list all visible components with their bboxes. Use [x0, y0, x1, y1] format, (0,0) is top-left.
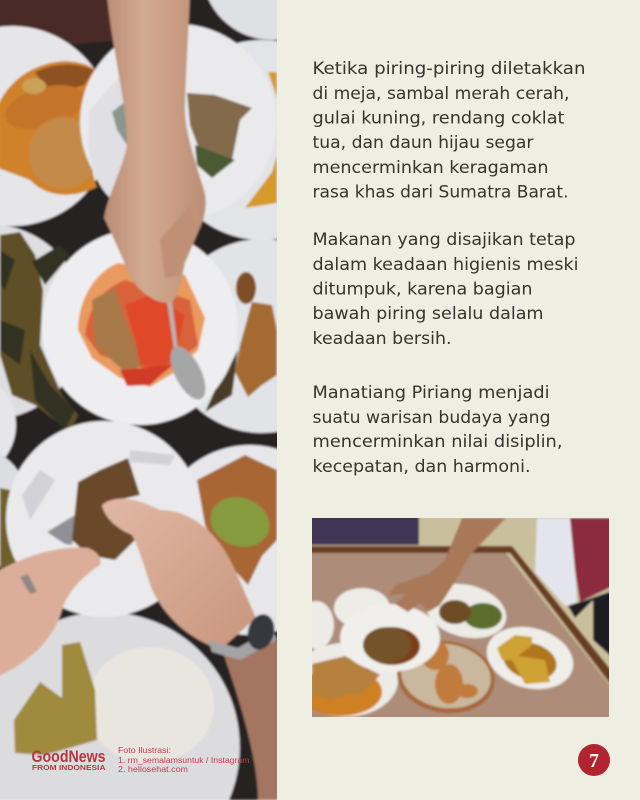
red chili strips [125, 295, 185, 370]
meat [363, 627, 411, 663]
dark edge [205, 350, 238, 412]
plate: lower centre [6, 421, 202, 617]
food: rendang [72, 458, 140, 560]
text block: paragraph 3: Manatiang Piriang menjadi [312, 383, 550, 403]
plate: brown rim [392, 635, 500, 719]
ring [20, 574, 37, 594]
food: yellow curry [497, 635, 561, 685]
badge number: 7 [589, 750, 599, 772]
food: greens at lower left [0, 488, 15, 572]
white shirt [535, 518, 577, 606]
food: fish with green sambal [197, 455, 277, 585]
bowl [168, 345, 206, 400]
food: rendang [363, 627, 420, 665]
text block: paragraph 1: tua, dan daun hijau segar [312, 133, 534, 153]
curry sauce [499, 637, 561, 685]
brown meat [439, 600, 471, 624]
text block: paragraph 2: ditumpuk, karena bagian [312, 280, 532, 300]
plate: bottom [0, 612, 240, 800]
food: green-flecked fish [0, 232, 78, 432]
panel: photo of waiter placing plates on table [292, 510, 615, 725]
yellow pieces [497, 635, 550, 684]
fish [197, 455, 277, 585]
text block: paragraph 3: suatu warisan budaya yang [312, 408, 550, 428]
hand: right [102, 499, 256, 650]
egg one [6, 84, 82, 128]
arm and hand: top [104, 0, 206, 303]
photo credits [118, 746, 250, 774]
plate: back left [334, 588, 390, 628]
panel: photo of Padang dishes with hands [0, 0, 277, 800]
thumb shading [160, 212, 196, 278]
curry [298, 668, 382, 716]
red oil [85, 280, 198, 372]
food: dark greens [0, 245, 75, 430]
plate: mid left [0, 224, 67, 418]
drumstick [236, 272, 256, 304]
dark trousers [568, 590, 615, 660]
text block: paragraph 1: mencerminkan keragaman [312, 158, 548, 178]
red apron [570, 518, 615, 602]
table top [305, 553, 615, 725]
badge circle [578, 744, 610, 776]
green sambal [204, 489, 276, 555]
plate: mid right [195, 238, 277, 435]
fish pieces [312, 656, 380, 700]
food: orange gulai [0, 61, 97, 195]
text block: paragraph 3: kecepatan, dan harmoni. [312, 457, 530, 477]
plate: top left [0, 24, 98, 228]
plate: lower left sliver [0, 447, 30, 573]
text block: paragraph 2: Makanan yang disajikan tetap [312, 230, 576, 250]
text block: paragraph 1 [312, 59, 586, 202]
plate: far right upper [201, 38, 277, 241]
text block: paragraph 1: gulai kuning, rendang coklat [312, 108, 565, 128]
logo wordmark: GoodNews [32, 748, 106, 766]
plate shading [90, 80, 126, 198]
text block: paragraph 2: dalam keadaan higienis meski [312, 255, 578, 275]
bracelet [208, 628, 277, 660]
sauce [364, 627, 420, 665]
plate: left sliver [0, 414, 18, 458]
fork [47, 515, 75, 545]
plate: left edge [298, 601, 334, 649]
handle [167, 300, 178, 350]
chicken main [435, 664, 463, 704]
plate: top right [202, 0, 342, 40]
purple chair [305, 510, 419, 545]
text block: paragraph 2: bawah piring selalu dalam [312, 304, 544, 324]
text block: paragraph 1: Ketika piring-piring diletakkan [312, 59, 586, 79]
food: curry fish [298, 656, 382, 716]
text block: paragraph 2: keadaan bersih. [312, 329, 452, 349]
tablecloth top [0, 0, 112, 45]
rice [86, 647, 214, 763]
plate: bottom left [292, 643, 398, 717]
sauce [78, 263, 205, 387]
plate: right [480, 618, 580, 698]
grey leaf [112, 100, 127, 145]
dark sauce [34, 64, 94, 88]
meat [92, 288, 145, 372]
brown meat [187, 93, 252, 165]
watch face [244, 611, 278, 653]
waiter arm and hand [388, 518, 506, 612]
chicken body [235, 302, 277, 397]
spoon [166, 301, 206, 400]
chicken top [421, 640, 449, 670]
text block: paragraph 3 [312, 383, 562, 477]
plate: back right [420, 576, 512, 646]
roll [22, 78, 46, 94]
text block: paragraph 1: di meja, sambal merah cerah, [312, 84, 570, 104]
sauce: yellow curry on right plate [245, 72, 277, 208]
logo: GoodNews [32, 748, 106, 772]
floor [305, 510, 615, 725]
plate: lower right [155, 445, 345, 635]
text block: paragraph 3: mencerminkan nilai disiplin, [312, 432, 562, 452]
credit two: 2. hellosehat.com [118, 765, 188, 774]
forearm: bottom right [222, 640, 282, 800]
plate: centre held [340, 604, 440, 672]
lower strips [120, 365, 172, 386]
greens [195, 145, 235, 178]
table surface [0, 0, 282, 800]
text block: paragraph 2 [312, 230, 578, 349]
plate: top centre [78, 22, 238, 171]
credit heading: Foto Ilustrasi: [118, 746, 171, 755]
curry sauce [0, 61, 97, 195]
chicken wing [456, 684, 478, 698]
food: yellow fish [14, 642, 97, 755]
logo tagline: FROM INDONESIA [32, 763, 106, 772]
food: fried chicken [421, 640, 478, 704]
food: sambal [78, 263, 205, 387]
green vegetables [464, 603, 502, 629]
food: greens and meat [439, 600, 502, 629]
food: mixed vegetables [112, 93, 252, 178]
credit one: 1. rm_semalamsuntuk / Instagram [118, 756, 250, 765]
egg two [29, 117, 97, 189]
wristwatch [208, 611, 278, 660]
plate: mid centre [42, 229, 238, 425]
text block: paragraph 1: rasa khas dari Sumatra Barat. [312, 182, 568, 202]
food: fried chicken [205, 272, 277, 412]
hand: left [0, 547, 100, 678]
plate shadow [22, 450, 175, 520]
page number badge [578, 744, 610, 776]
plate: brown rim inner [397, 638, 495, 714]
table edge [305, 546, 615, 690]
